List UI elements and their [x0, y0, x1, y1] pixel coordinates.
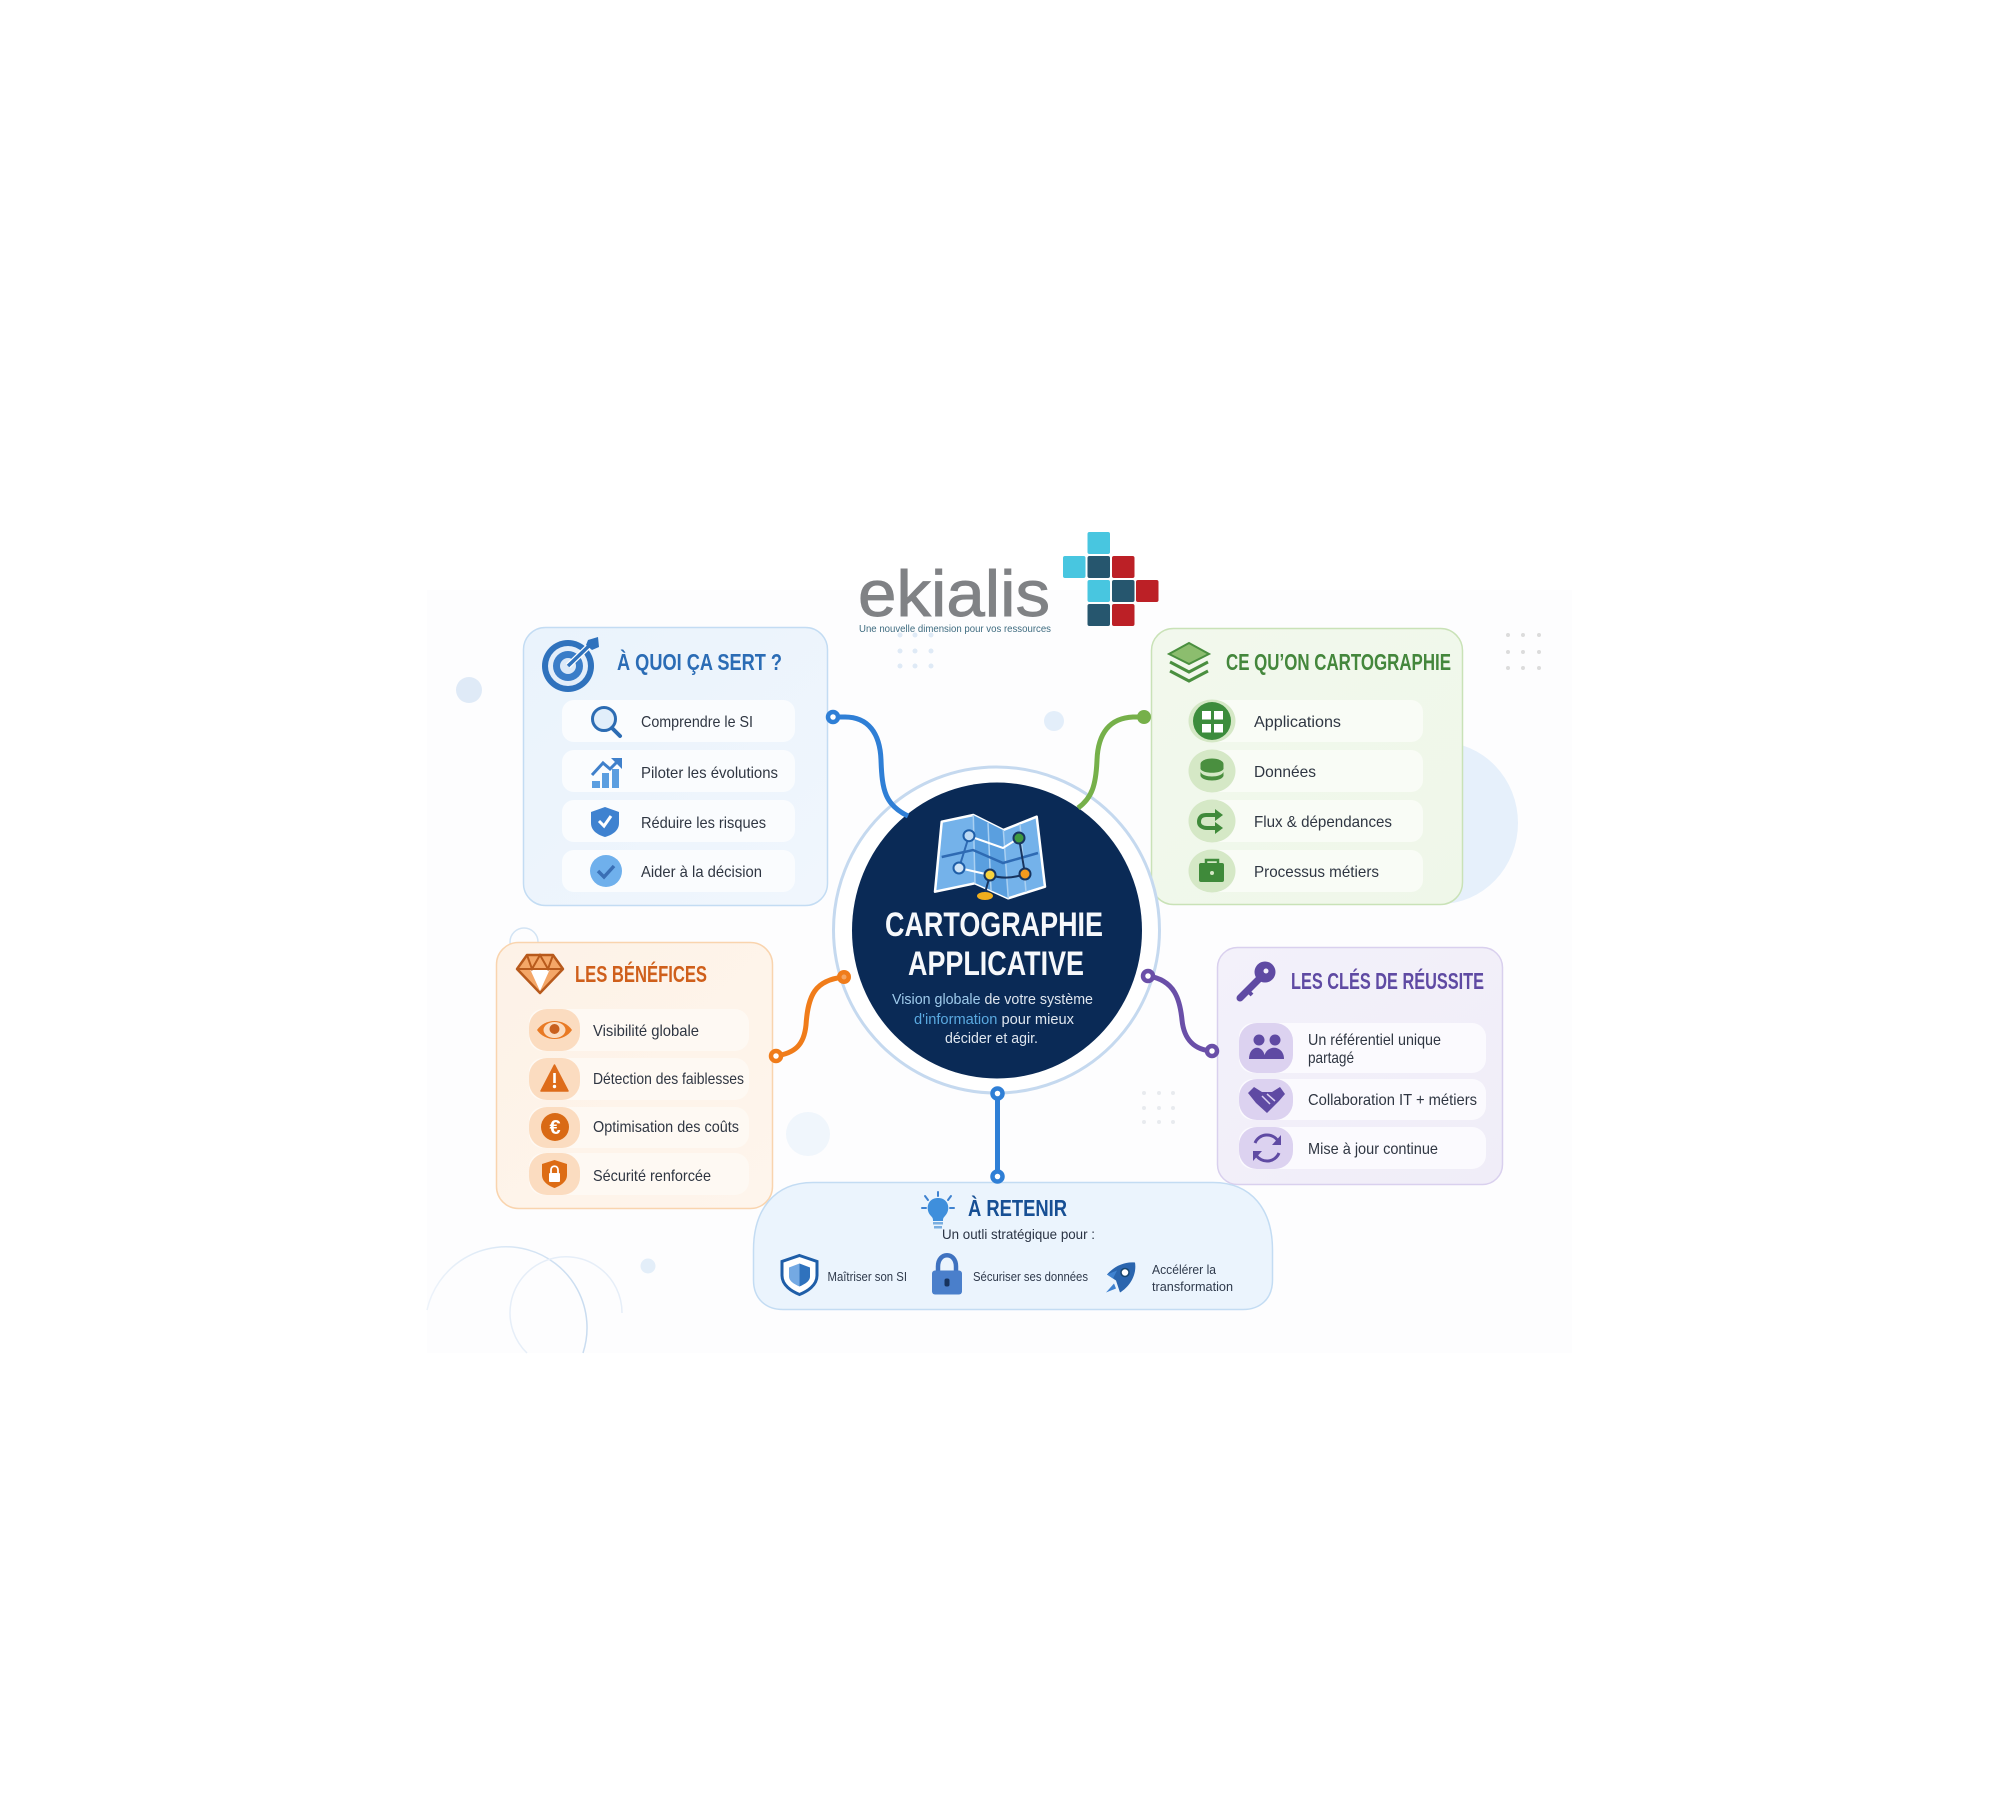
- icon: eye: [529, 1009, 580, 1051]
- subtitle: Un outli stratégique pour :: [942, 1226, 1095, 1242]
- row: Securite renforcee: [529, 1153, 749, 1195]
- label: Visibilité globale: [593, 1023, 699, 1040]
- heading: A quoi ca sert: À QUOI ÇA SERT ?: [617, 648, 782, 675]
- row: Mise a jour continue: [1239, 1127, 1486, 1169]
- panel: A retenir: [754, 1182, 1272, 1310]
- icon: layers: [1169, 643, 1209, 681]
- hub description: [892, 991, 1093, 1047]
- row: Aider a la decision: [562, 850, 795, 892]
- icon: euro: [529, 1107, 580, 1148]
- label: Sécuriser ses données: [973, 1269, 1088, 1284]
- label: Optimisation des coûts: [593, 1119, 739, 1136]
- icon: people: [1239, 1023, 1293, 1073]
- icon: map: [935, 815, 1045, 900]
- icon: handshake: [1239, 1079, 1293, 1120]
- icon: database: [1188, 750, 1236, 792]
- row: Applications: [1188, 700, 1423, 742]
- label: Collaboration IT + métiers: [1308, 1092, 1477, 1109]
- icon: magnifier: [592, 708, 620, 736]
- heading: Ce qu'on cartographie: CE QU’ON CARTOGRAPHIE: [1226, 649, 1451, 675]
- icon: shield lock: [529, 1153, 580, 1195]
- background decorations: [427, 590, 1572, 1353]
- label: Détection des faiblesses: [593, 1071, 744, 1088]
- hub description: d'information pour mieux: [914, 1011, 1074, 1028]
- label: Un référentiel unique: [1308, 1032, 1441, 1049]
- icon: flow arrows: [1188, 800, 1236, 842]
- title: Cartographie applicative: CARTOGRAPHIE: [885, 906, 1103, 944]
- connector: green to panel Ce qu'on cartographie: [1078, 710, 1151, 808]
- row: Donnees: [1188, 750, 1423, 792]
- row: Detection des faiblesses: [529, 1058, 749, 1100]
- logo: ekialis: [858, 532, 1158, 635]
- icon: grid: [1188, 700, 1236, 742]
- connector: vertical to panel A retenir: [992, 1088, 1002, 1182]
- label: Aider à la décision: [641, 864, 762, 881]
- icon: light bulb: [922, 1192, 954, 1228]
- row: Comprendre le SI: [562, 700, 795, 742]
- panel: Les benefices: [496, 942, 772, 1208]
- icon: check: [590, 855, 622, 887]
- row: Un referentiel unique partage: [1239, 1023, 1486, 1073]
- icon: shield: [782, 1256, 817, 1294]
- central hub: [834, 767, 1160, 1093]
- panel: A quoi ca sert: [524, 628, 828, 906]
- dark disc: [852, 782, 1142, 1078]
- connector: blue to panel A quoi ca sert: [828, 712, 908, 816]
- label: Accélérer la: [1152, 1262, 1217, 1277]
- heading: A retenir: À RETENIR: [968, 1194, 1067, 1221]
- row: Optimisation des couts: [529, 1107, 749, 1148]
- row: Processus metiers: [1188, 850, 1423, 892]
- logo tagline: Une nouvelle dimension pour vos ressources: [859, 623, 1051, 635]
- title: Cartographie applicative: [885, 906, 1103, 983]
- heading: Les cles de reussite: LES CLÉS DE RÉUSSITE: [1291, 967, 1484, 994]
- icon: target: [542, 637, 599, 692]
- heading: Les benefices: LES BÉNÉFICES: [575, 960, 707, 987]
- label: Réduire les risques: [641, 815, 766, 832]
- icon: briefcase: [1188, 850, 1236, 892]
- label: Piloter les évolutions: [641, 765, 778, 782]
- title: Cartographie applicative: APPLICATIVE: [908, 945, 1084, 983]
- label: Comprendre le SI: [641, 714, 753, 731]
- label: [1308, 1032, 1441, 1067]
- label: Mise à jour continue: [1308, 1141, 1438, 1158]
- label: [1152, 1262, 1233, 1294]
- connector: purple to panel Les cles de reussite: [1143, 971, 1217, 1056]
- label: Maîtriser son SI: [828, 1269, 907, 1284]
- icon: diamond: [517, 955, 563, 993]
- label: Flux & dépendances: [1254, 814, 1392, 831]
- item: Accelerer la transformation: [1106, 1262, 1233, 1294]
- row: Collaboration IT + metiers: [1239, 1079, 1486, 1120]
- label: Processus métiers: [1254, 864, 1379, 881]
- item: Securiser ses donnees: [932, 1255, 1088, 1294]
- icon: warning: [529, 1058, 580, 1100]
- label: Données: [1254, 764, 1316, 781]
- connector: orange to panel Les benefices: [771, 970, 851, 1061]
- icon: euro: €: [549, 1117, 561, 1139]
- logo wordmark: ekialis: [858, 557, 1050, 630]
- row: Flux et dependances: [1188, 800, 1423, 842]
- icon: refresh: [1239, 1127, 1293, 1169]
- row: Reduire les risques: [562, 800, 795, 842]
- label: transformation: [1152, 1279, 1233, 1294]
- panel: Les cles de reussite: [1218, 948, 1502, 1184]
- label: Sécurité renforcée: [593, 1168, 711, 1185]
- label: partagé: [1308, 1050, 1354, 1067]
- label: Applications: [1254, 714, 1341, 731]
- hub description: Vision globale de votre système: [892, 991, 1093, 1008]
- row: Visibilite globale: [529, 1009, 749, 1051]
- row: Piloter les evolutions: [562, 750, 795, 792]
- icon: shield: [591, 807, 619, 837]
- icon: padlock: [932, 1255, 962, 1294]
- hub description: décider et agir.: [945, 1030, 1038, 1047]
- icon: key: [1240, 962, 1276, 998]
- logo squares: [1063, 532, 1158, 626]
- outer ring: [834, 767, 1160, 1093]
- panel: Ce qu'on cartographie: [1152, 628, 1462, 904]
- item: Maitriser son SI: [782, 1256, 907, 1294]
- icon: growth chart: [592, 758, 622, 788]
- icon: rocket: [1106, 1262, 1135, 1292]
